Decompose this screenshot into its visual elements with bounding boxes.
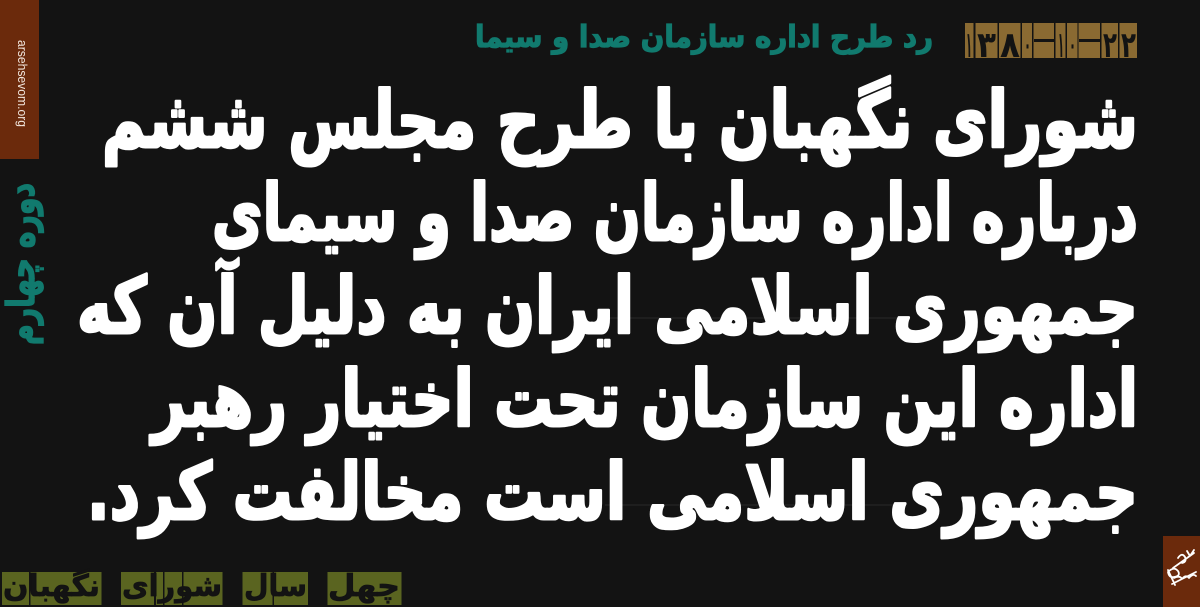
- top heading: رد طرح اداره سازمان صدا و سیما: [475, 20, 933, 55]
- date tag: ۱: [1058, 25, 1064, 66]
- date tag: ۸: [1000, 25, 1020, 66]
- panel: site label band: arsehsevom.org: [15, 40, 30, 127]
- footer series title: چهل: [328, 569, 400, 604]
- date tag: ٠: [1024, 31, 1031, 59]
- date tag: ۲: [1103, 25, 1117, 66]
- footer series title: شورای: [122, 569, 222, 604]
- footer series title: نگهبان: [3, 568, 100, 604]
- vertical heading: fourth term: دوره چهارم: [0, 183, 44, 345]
- footer series title: [2, 568, 402, 605]
- date tag: [965, 23, 1137, 66]
- footer series title: سال: [244, 569, 307, 604]
- main statement: [77, 76, 1138, 538]
- date tag: ۲: [1121, 25, 1136, 66]
- date tag: ٠: [1069, 31, 1076, 59]
- date tag: ۳: [977, 25, 996, 66]
- date tag: ۱: [966, 25, 972, 66]
- logo badge: [1163, 536, 1200, 607]
- panel: site label band: [0, 0, 39, 159]
